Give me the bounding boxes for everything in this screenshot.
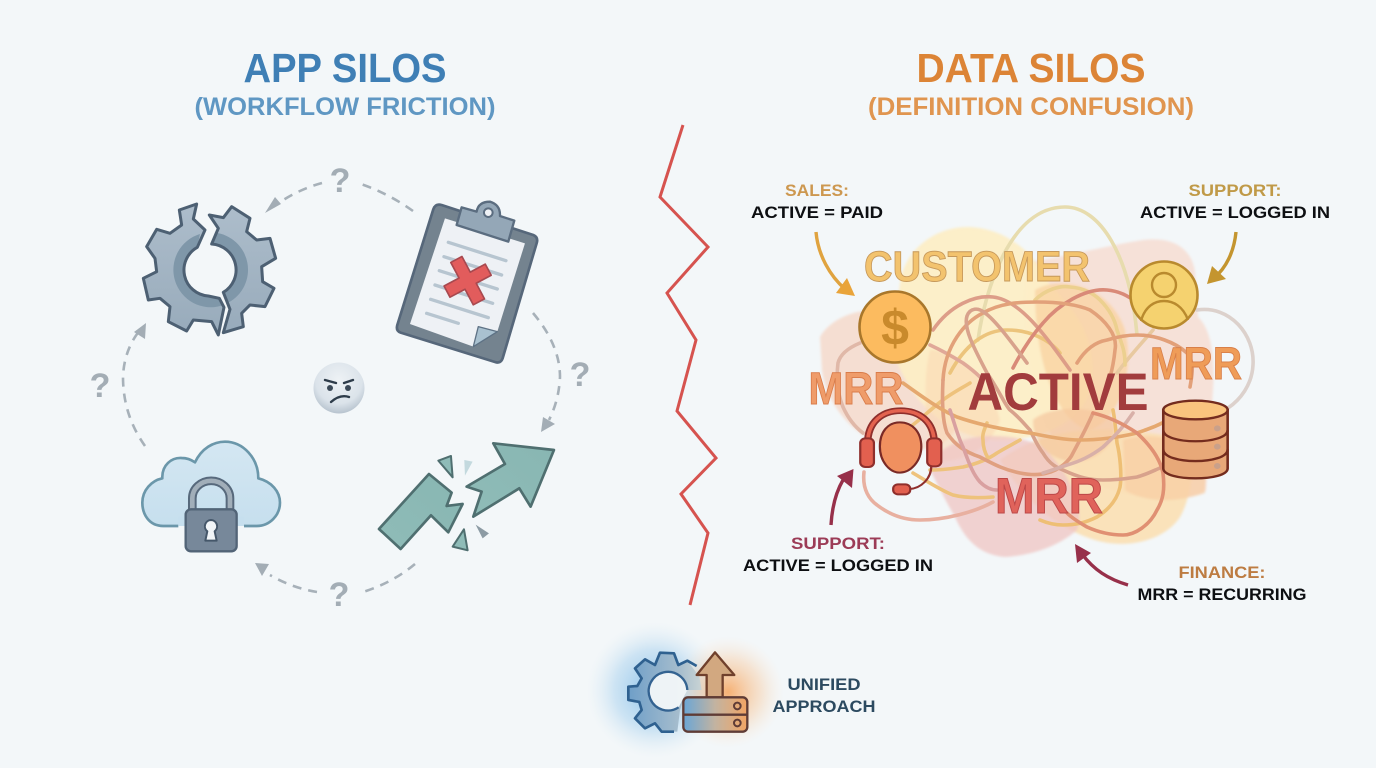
arrow: clipboard to gear [273,183,413,211]
heading: data silos: (DEFINITION CONFUSION) [868,93,1194,121]
icon: headset agent [860,411,941,494]
callout: support definition top: ACTIVE = LOGGED IN [1140,203,1330,222]
word: MRR left: MRR [808,363,904,414]
callout: finance definition [1138,563,1306,604]
divider: red zigzag line [660,125,716,605]
question marks: ? [329,576,349,614]
icon: unified gear [628,653,702,732]
arrowheads [134,197,555,576]
heading: app silos: (WORKFLOW FRICTION) [194,93,496,121]
label: unified approach [772,675,876,716]
icon: database [1163,401,1228,478]
heading: app silos: APP SILOS [244,45,446,91]
word: active: ACTIVE [968,363,1148,422]
icon: frustrated face [314,362,364,414]
icon: broken gear [143,204,276,335]
icon: broken arrow [379,443,554,550]
icon: user badge [1130,262,1198,328]
callout: support definition top [1140,181,1330,222]
heading: app silos [194,45,496,121]
word: MRR bottom: MRR [995,468,1103,524]
arrow: broken arrow to cloud [270,564,415,592]
panel: app silos cycle [90,162,590,614]
icon: upload arrow and server [683,652,747,732]
callout: sales definition: SALES: [785,181,849,200]
question marks: ? [570,356,590,394]
icon: rejected clipboard [397,202,537,363]
label: unified approach: UNIFIED [788,675,860,694]
word: customer: CUSTOMER [864,243,1090,291]
arrow: clipboard to broken arrow [533,313,560,420]
callout: sales definition [751,181,883,222]
label: unified approach: APPROACH [772,697,876,716]
icon: dollar coin: $ [881,300,909,356]
arrow: cloud to gear [123,330,145,446]
tangle: looping lines [837,207,1253,535]
icon: dollar coin [860,292,930,362]
callout: support definition bottom: SUPPORT: [791,534,885,553]
question marks: ? [330,162,350,200]
heading: data silos [868,45,1194,121]
heading: data silos: DATA SILOS [916,45,1146,91]
callout: finance definition: MRR = RECURRING [1138,585,1306,604]
icon: locked cloud [142,442,280,551]
callout: support definition top: SUPPORT: [1188,181,1282,200]
panel: data silos tangle [743,181,1330,604]
arrow: sales to coin [816,232,855,296]
icon: unified approach [587,622,876,758]
glow: blue and orange [587,622,784,758]
callout: sales definition: ACTIVE = PAID [751,203,883,222]
arrow: support to headset [831,469,854,525]
arrow: support to user badge [1207,232,1236,284]
arrow: finance to tangle [1075,544,1128,585]
callout: finance definition: FINANCE: [1178,563,1266,582]
callout: support definition bottom [743,534,933,575]
word: MRR right: MRR [1150,338,1242,389]
callout: support definition bottom: ACTIVE = LOGGED IN [743,556,933,575]
question marks [90,162,590,614]
question marks: ? [90,367,110,405]
tangle: overlapping colour blobs [820,227,1214,557]
